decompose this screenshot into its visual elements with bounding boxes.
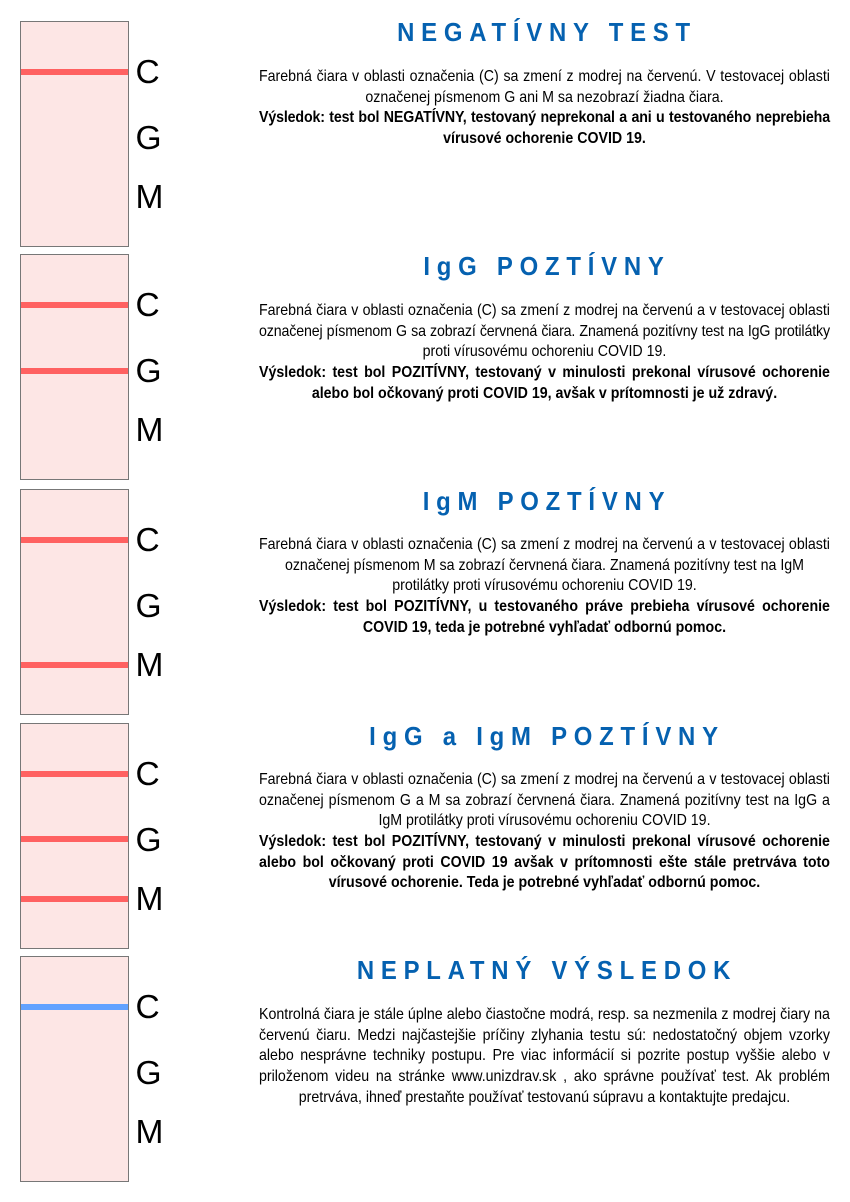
text block: IgG and IgM explanation: Výsledok: test bol POZITÍVNY, testovaný v minulosti prekonal vírusové ochorenie bbox=[259, 833, 830, 850]
text block: IgG explanation: Výsledok: test bol POZITÍVNY, testovaný v minulosti prekonal vírusové ochorenie bbox=[259, 364, 830, 381]
label G: G bbox=[136, 120, 162, 157]
label G: G bbox=[136, 822, 162, 859]
test strip: C and M lines red bbox=[20, 489, 129, 715]
text block: negative explanation: Farebná čiara v oblasti označenia (C) sa zmení z modrej na červenú. V testovacej oblasti bbox=[259, 68, 830, 85]
text block: IgG and IgM explanation: označenej písmenom G a M sa zobrazí červnená čiara. Znamená pozitívny test na IgG a bbox=[259, 792, 830, 809]
test strip: C, G and M lines red bbox=[20, 723, 129, 949]
text block: IgG and IgM explanation: vírusové ochorenie. Teda je potrebné vyhľadať odbornú pomoc. bbox=[329, 874, 760, 891]
label C: C bbox=[136, 989, 160, 1026]
label M: M bbox=[136, 179, 163, 216]
text block: invalid explanation: alebo nesprávne techniky postupu. Pre viac informácií si pozrite postup vyššie alebo v bbox=[259, 1047, 830, 1064]
text block: invalid explanation: Kontrolná čiara je stále úplne alebo čiastočne modrá, resp. sa nezmenila z modrej čiary na bbox=[259, 1006, 830, 1023]
text block: IgG explanation: proti vírusovému ochoreniu COVID 19. bbox=[423, 343, 666, 360]
text block: IgG and IgM explanation: alebo bol očkovaný proti COVID 19 avšak v prítomnosti ešte stále pretrváva toto bbox=[259, 854, 830, 871]
text block: invalid explanation bbox=[259, 1006, 830, 1106]
label M: M bbox=[136, 1114, 163, 1151]
text block: IgG explanation: označenej písmenom G sa zobrazí červnená čiara. Znamená pozitívny test na IgG protilátky bbox=[259, 323, 830, 340]
label G: G bbox=[136, 353, 162, 390]
panel: IgM positive bbox=[20, 486, 830, 715]
label C: C bbox=[136, 756, 160, 793]
heading: negative test: NEGATÍVNY TEST bbox=[397, 17, 696, 47]
text block: IgM explanation: protilátky proti vírusovému ochoreniu COVID 19. bbox=[392, 577, 697, 594]
label G: G bbox=[136, 588, 162, 625]
text block: negative explanation bbox=[259, 68, 830, 147]
text block: IgG explanation bbox=[259, 302, 830, 402]
label C: C bbox=[136, 54, 160, 91]
text block: invalid explanation: pretrváva, ihneď prestaňte používať testovanú súpravu a kontaktujte predajcu. bbox=[299, 1089, 790, 1106]
text block: IgM explanation: COVID 19, teda je potrebné vyhľadať odbornú pomoc. bbox=[363, 619, 726, 636]
text block: IgM explanation: označenej písmenom M sa zobrazí červnená čiara. Znamená pozitívny test na IgM bbox=[285, 557, 804, 574]
text block: IgM explanation: Výsledok: test bol POZITÍVNY, u testovaného práve prebieha vírusové ochorenie bbox=[259, 598, 830, 615]
text block: invalid explanation: červenú čiaru. Medzi najčastejšie príčiny zlyhania testu sú: nedostatočný objem vzorky bbox=[259, 1027, 830, 1044]
test strip: C line blue bbox=[20, 956, 129, 1182]
label M: M bbox=[136, 647, 163, 684]
panel: invalid result bbox=[20, 955, 830, 1182]
panel: IgG and IgM positive bbox=[20, 721, 830, 949]
panel: IgG positive bbox=[20, 251, 830, 480]
text block: IgM explanation: Farebná čiara v oblasti označenia (C) sa zmení z modrej na červenú a v testovacej oblasti bbox=[259, 536, 830, 553]
text block: IgG and IgM explanation bbox=[259, 771, 830, 891]
text block: negative explanation: označenej písmenom G ani M sa nezobrazí žiadna čiara. bbox=[365, 89, 724, 106]
heading: IgM positive: IgM POZTÍVNY bbox=[422, 486, 671, 516]
text block: IgG and IgM explanation: IgM protilátky proti vírusovému ochoreniu COVID 19. bbox=[378, 812, 711, 829]
text block: IgM explanation bbox=[259, 536, 830, 636]
panel: negative test bbox=[20, 17, 830, 247]
text block: IgG and IgM explanation: Farebná čiara v oblasti označenia (C) sa zmení z modrej na červenú a v testovacej oblasti bbox=[259, 771, 830, 788]
text block: invalid explanation: priloženom videu na stránke www.unizdrav.sk , ako správne používať test. Ak problém bbox=[259, 1068, 830, 1085]
heading: invalid result: NEPLATNÝ VÝSLEDOK bbox=[356, 955, 737, 985]
text block: negative explanation: Výsledok: test bol NEGATÍVNY, testovaný neprekonal a ani u testovaného neprebieha bbox=[259, 109, 830, 126]
label C: C bbox=[136, 522, 160, 559]
label C: C bbox=[136, 287, 160, 324]
test strip: C and G lines red bbox=[20, 254, 129, 480]
text block: IgG explanation: Farebná čiara v oblasti označenia (C) sa zmení z modrej na červenú a v testovacej oblasti bbox=[259, 302, 830, 319]
label M: M bbox=[136, 881, 163, 918]
heading: IgG positive: IgG POZTÍVNY bbox=[423, 251, 670, 281]
label G: G bbox=[136, 1055, 162, 1092]
text block: negative explanation: vírusové ochorenie COVID 19. bbox=[443, 130, 646, 147]
heading: IgG and IgM positive: IgG a IgM POZTÍVNY bbox=[369, 721, 724, 751]
text block: IgG explanation: alebo bol očkovaný proti COVID 19, avšak v prítomnosti je už zdravý. bbox=[312, 385, 777, 402]
test strip: C line red bbox=[20, 21, 129, 247]
label M: M bbox=[136, 412, 163, 449]
